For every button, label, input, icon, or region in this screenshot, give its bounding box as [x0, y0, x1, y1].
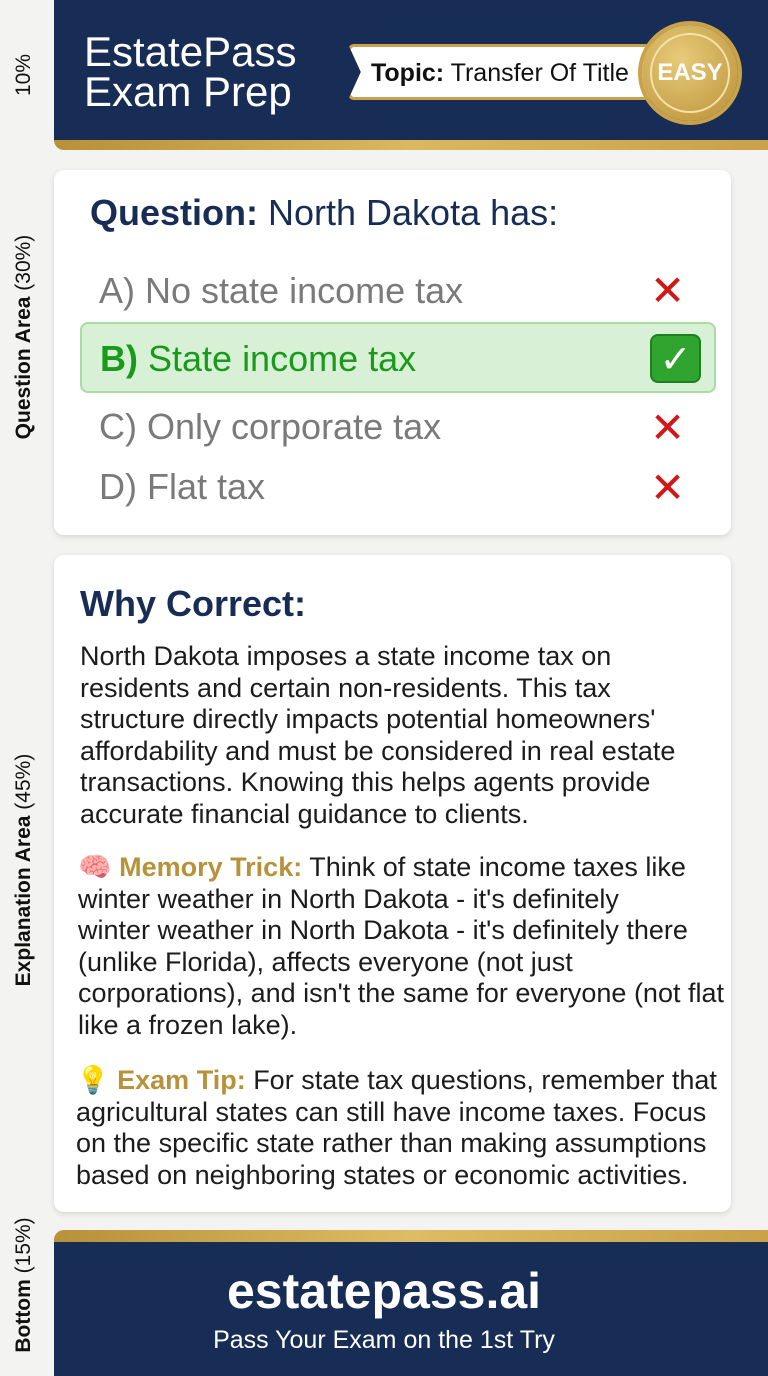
explanation text: transactions. Knowing this helps agents provide [80, 767, 650, 797]
brand title [84, 28, 296, 115]
exam tip [76, 1064, 717, 1190]
option A: A) No state income tax [99, 270, 463, 311]
topic ribbon [348, 44, 668, 100]
footer [54, 1230, 768, 1376]
explanation text: accurate financial guidance to clients. [80, 798, 529, 828]
brand title: EstatePass [84, 28, 296, 75]
explanation text: structure directly impacts potential homeowners' [80, 704, 655, 734]
icon: wrong A: ✕ [650, 267, 685, 314]
header [54, 0, 768, 150]
panel: explanation [54, 555, 731, 1212]
question heading: Question: North Dakota has: [90, 192, 558, 233]
option B correct: B) State income tax [100, 338, 416, 379]
exam tip: based on neighboring states or economic activities. [76, 1160, 688, 1190]
explanation text: residents and certain non-residents. This tax [80, 672, 611, 702]
icon: wrong C: ✕ [650, 404, 685, 451]
brand title: Exam Prep [84, 68, 292, 115]
panel: question [54, 170, 731, 535]
side label: 10%: 10% [12, 54, 35, 96]
topic ribbon: Topic: Transfer Of Title [371, 59, 629, 87]
memory trick [78, 852, 724, 1040]
side label: explanation area: Explanation Area (45%) [12, 754, 35, 986]
icon: check [650, 334, 701, 383]
memory trick: winter weather in North Dakota - it's definitely [78, 884, 619, 914]
badge: easy [642, 25, 738, 121]
option D: D) Flat tax [99, 466, 265, 507]
side label: question area: Question Area (30%) [12, 235, 35, 439]
explanation text [80, 641, 675, 828]
exam tip: agricultural states can still have income taxes. Focus [76, 1096, 706, 1126]
icon: wrong D: ✕ [650, 464, 685, 511]
side label: bottom: Bottom (15%) [12, 1217, 35, 1353]
exam tip: 💡 Exam Tip: For state tax questions, remember that [76, 1065, 717, 1095]
memory trick: (unlike Florida), affects everyone (not just [78, 947, 573, 977]
heading: why correct: Why Correct: [80, 583, 306, 624]
memory trick: winter weather in North Dakota - it's definitely there [78, 915, 688, 945]
badge: easy: EASY [657, 59, 723, 86]
exam tip: on the specific state rather than making assumptions [76, 1128, 706, 1158]
icon: check: ✓ [660, 339, 691, 381]
explanation text: North Dakota imposes a state income tax on [80, 641, 611, 671]
option B correct [80, 322, 716, 393]
footer url: estatepass.ai [227, 1263, 541, 1319]
memory trick: 🧠 Memory Trick: Think of state income taxes like [78, 852, 686, 882]
option C: C) Only corporate tax [99, 406, 441, 447]
footer tagline: Pass Your Exam on the 1st Try [213, 1326, 555, 1354]
explanation text: affordability and must be considered in real estate [80, 736, 675, 766]
memory trick: like a frozen lake). [78, 1010, 297, 1040]
memory trick: corporations), and isn't the same for everyone (not flat [78, 978, 724, 1008]
